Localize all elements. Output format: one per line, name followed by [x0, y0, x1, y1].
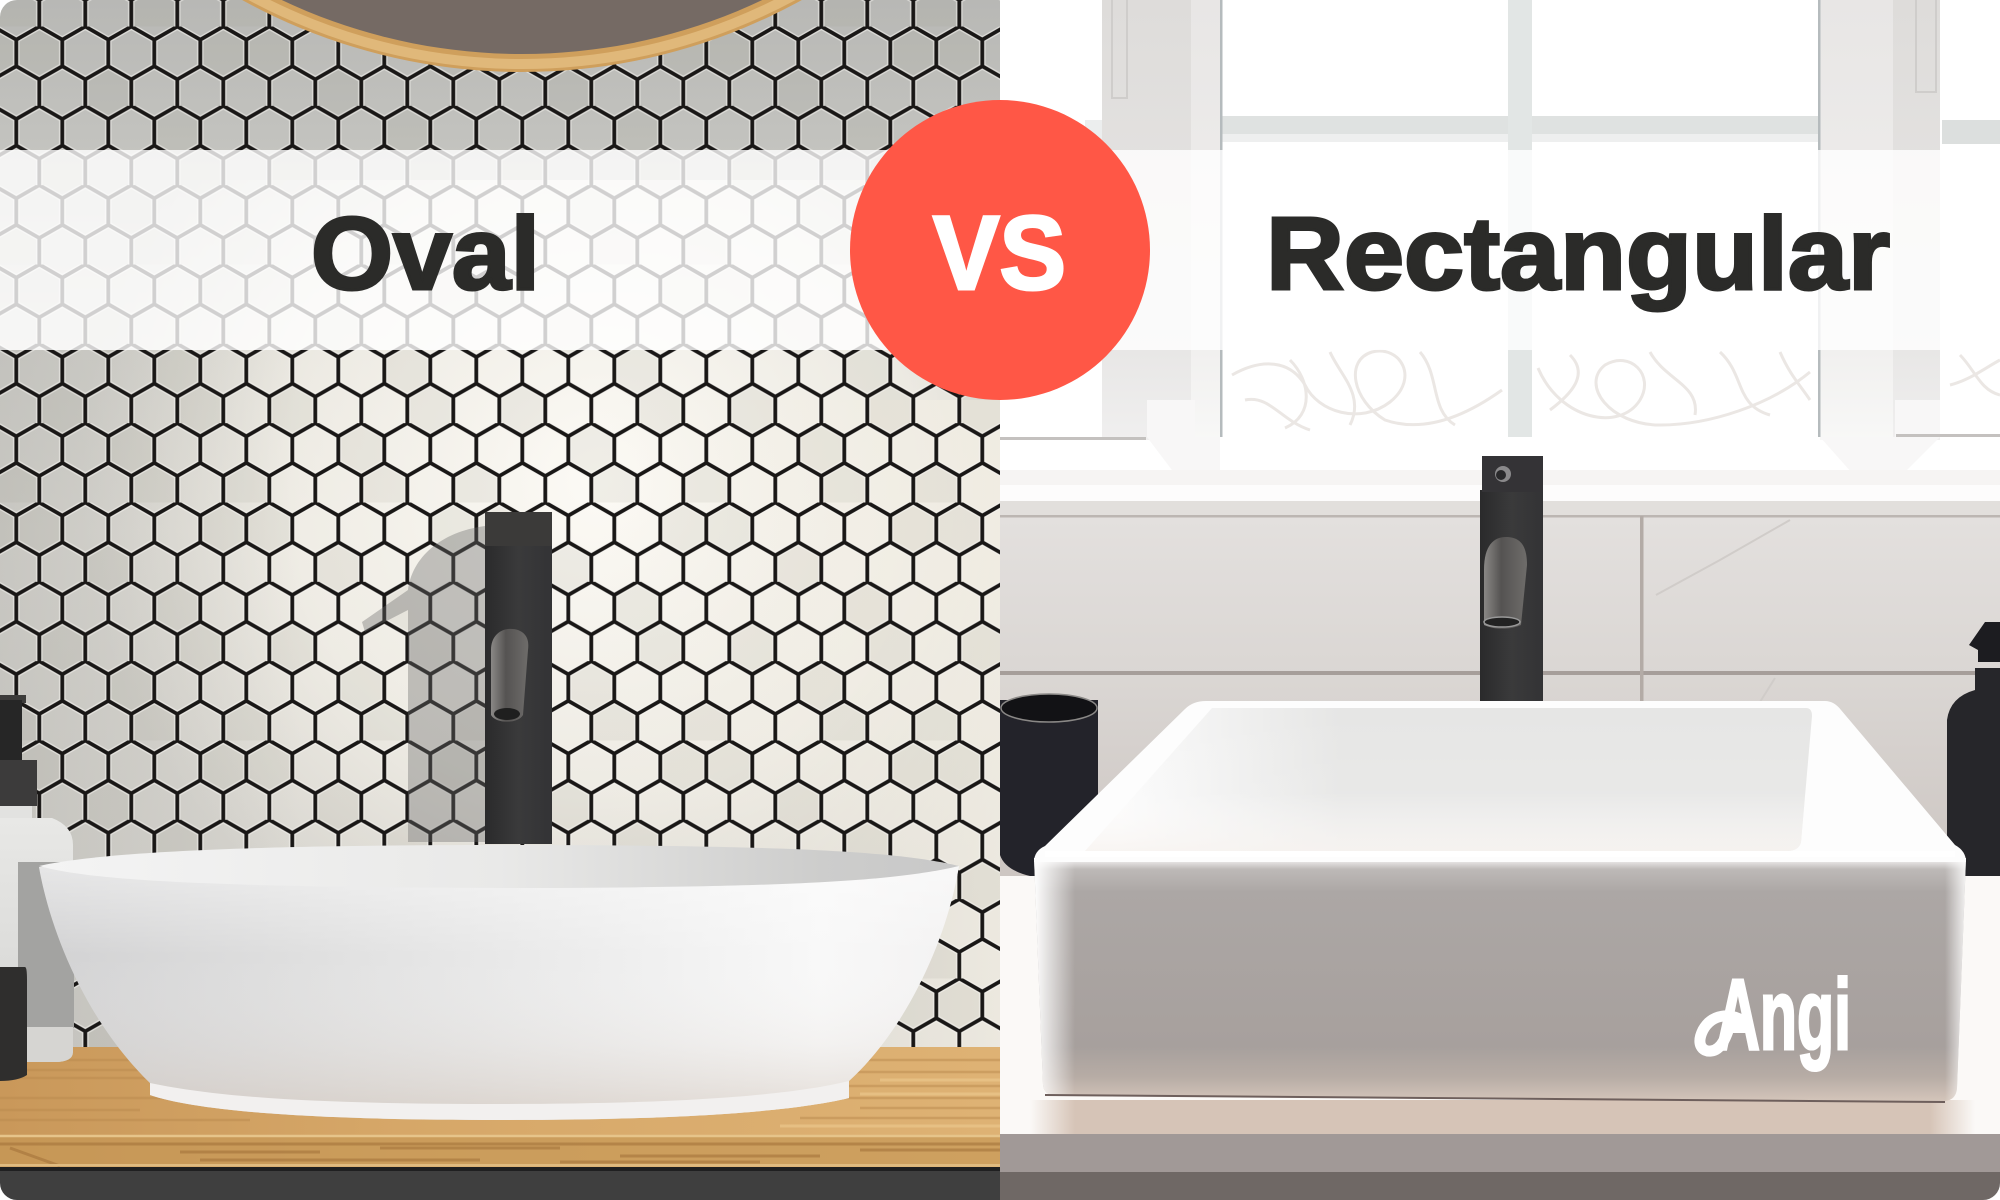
sink foot: [150, 1081, 849, 1120]
faucet shadow on wall: [362, 526, 485, 842]
faucet spout: [1484, 537, 1527, 629]
translucent title band: [0, 150, 2000, 350]
sink rim: [39, 845, 959, 888]
right window frame: [1820, 0, 1940, 482]
round wooden mirror: [242, 0, 802, 72]
hexagon tile wall: [0, 0, 1000, 1060]
Angi logo: [1694, 975, 1848, 1072]
sink basin: [1181, 708, 1812, 838]
wooden countertop: [0, 1047, 1000, 1167]
black oval faucet: [485, 512, 552, 844]
heading: Oval: Oval: [311, 196, 540, 311]
window muntins: [1085, 0, 2000, 437]
lace window film: [1232, 351, 2000, 430]
faucet spout: [491, 629, 528, 722]
black cup: [1000, 694, 1098, 876]
panel: rectangular sink photo: [1000, 0, 2000, 1200]
sink front face: [1034, 858, 1966, 1101]
left window frame: [1102, 0, 1220, 482]
Angi wordmark: Angi: [1716, 959, 1851, 1071]
heading: Rectangular: Rectangular: [1266, 196, 1890, 311]
window sill: [1000, 500, 2000, 501]
black soap dispenser: [1947, 622, 2000, 890]
marble wall tiles: [1000, 500, 2000, 900]
sink top rim: [1034, 701, 1966, 862]
dark counter edge: [0, 1167, 1000, 1200]
VS badge: [850, 100, 1150, 400]
window base lines: [1000, 434, 2000, 485]
white counter: [1000, 876, 2000, 1200]
panel: oval sink photo: [0, 0, 1102, 1200]
black rectangular faucet: [1480, 456, 1543, 702]
VS label: VS: [933, 195, 1066, 312]
soap bottles: [0, 695, 74, 1081]
white rectangular vessel sink: [1034, 701, 1966, 1102]
white oval vessel sink: [39, 845, 959, 1120]
bright window: [1000, 0, 2000, 500]
